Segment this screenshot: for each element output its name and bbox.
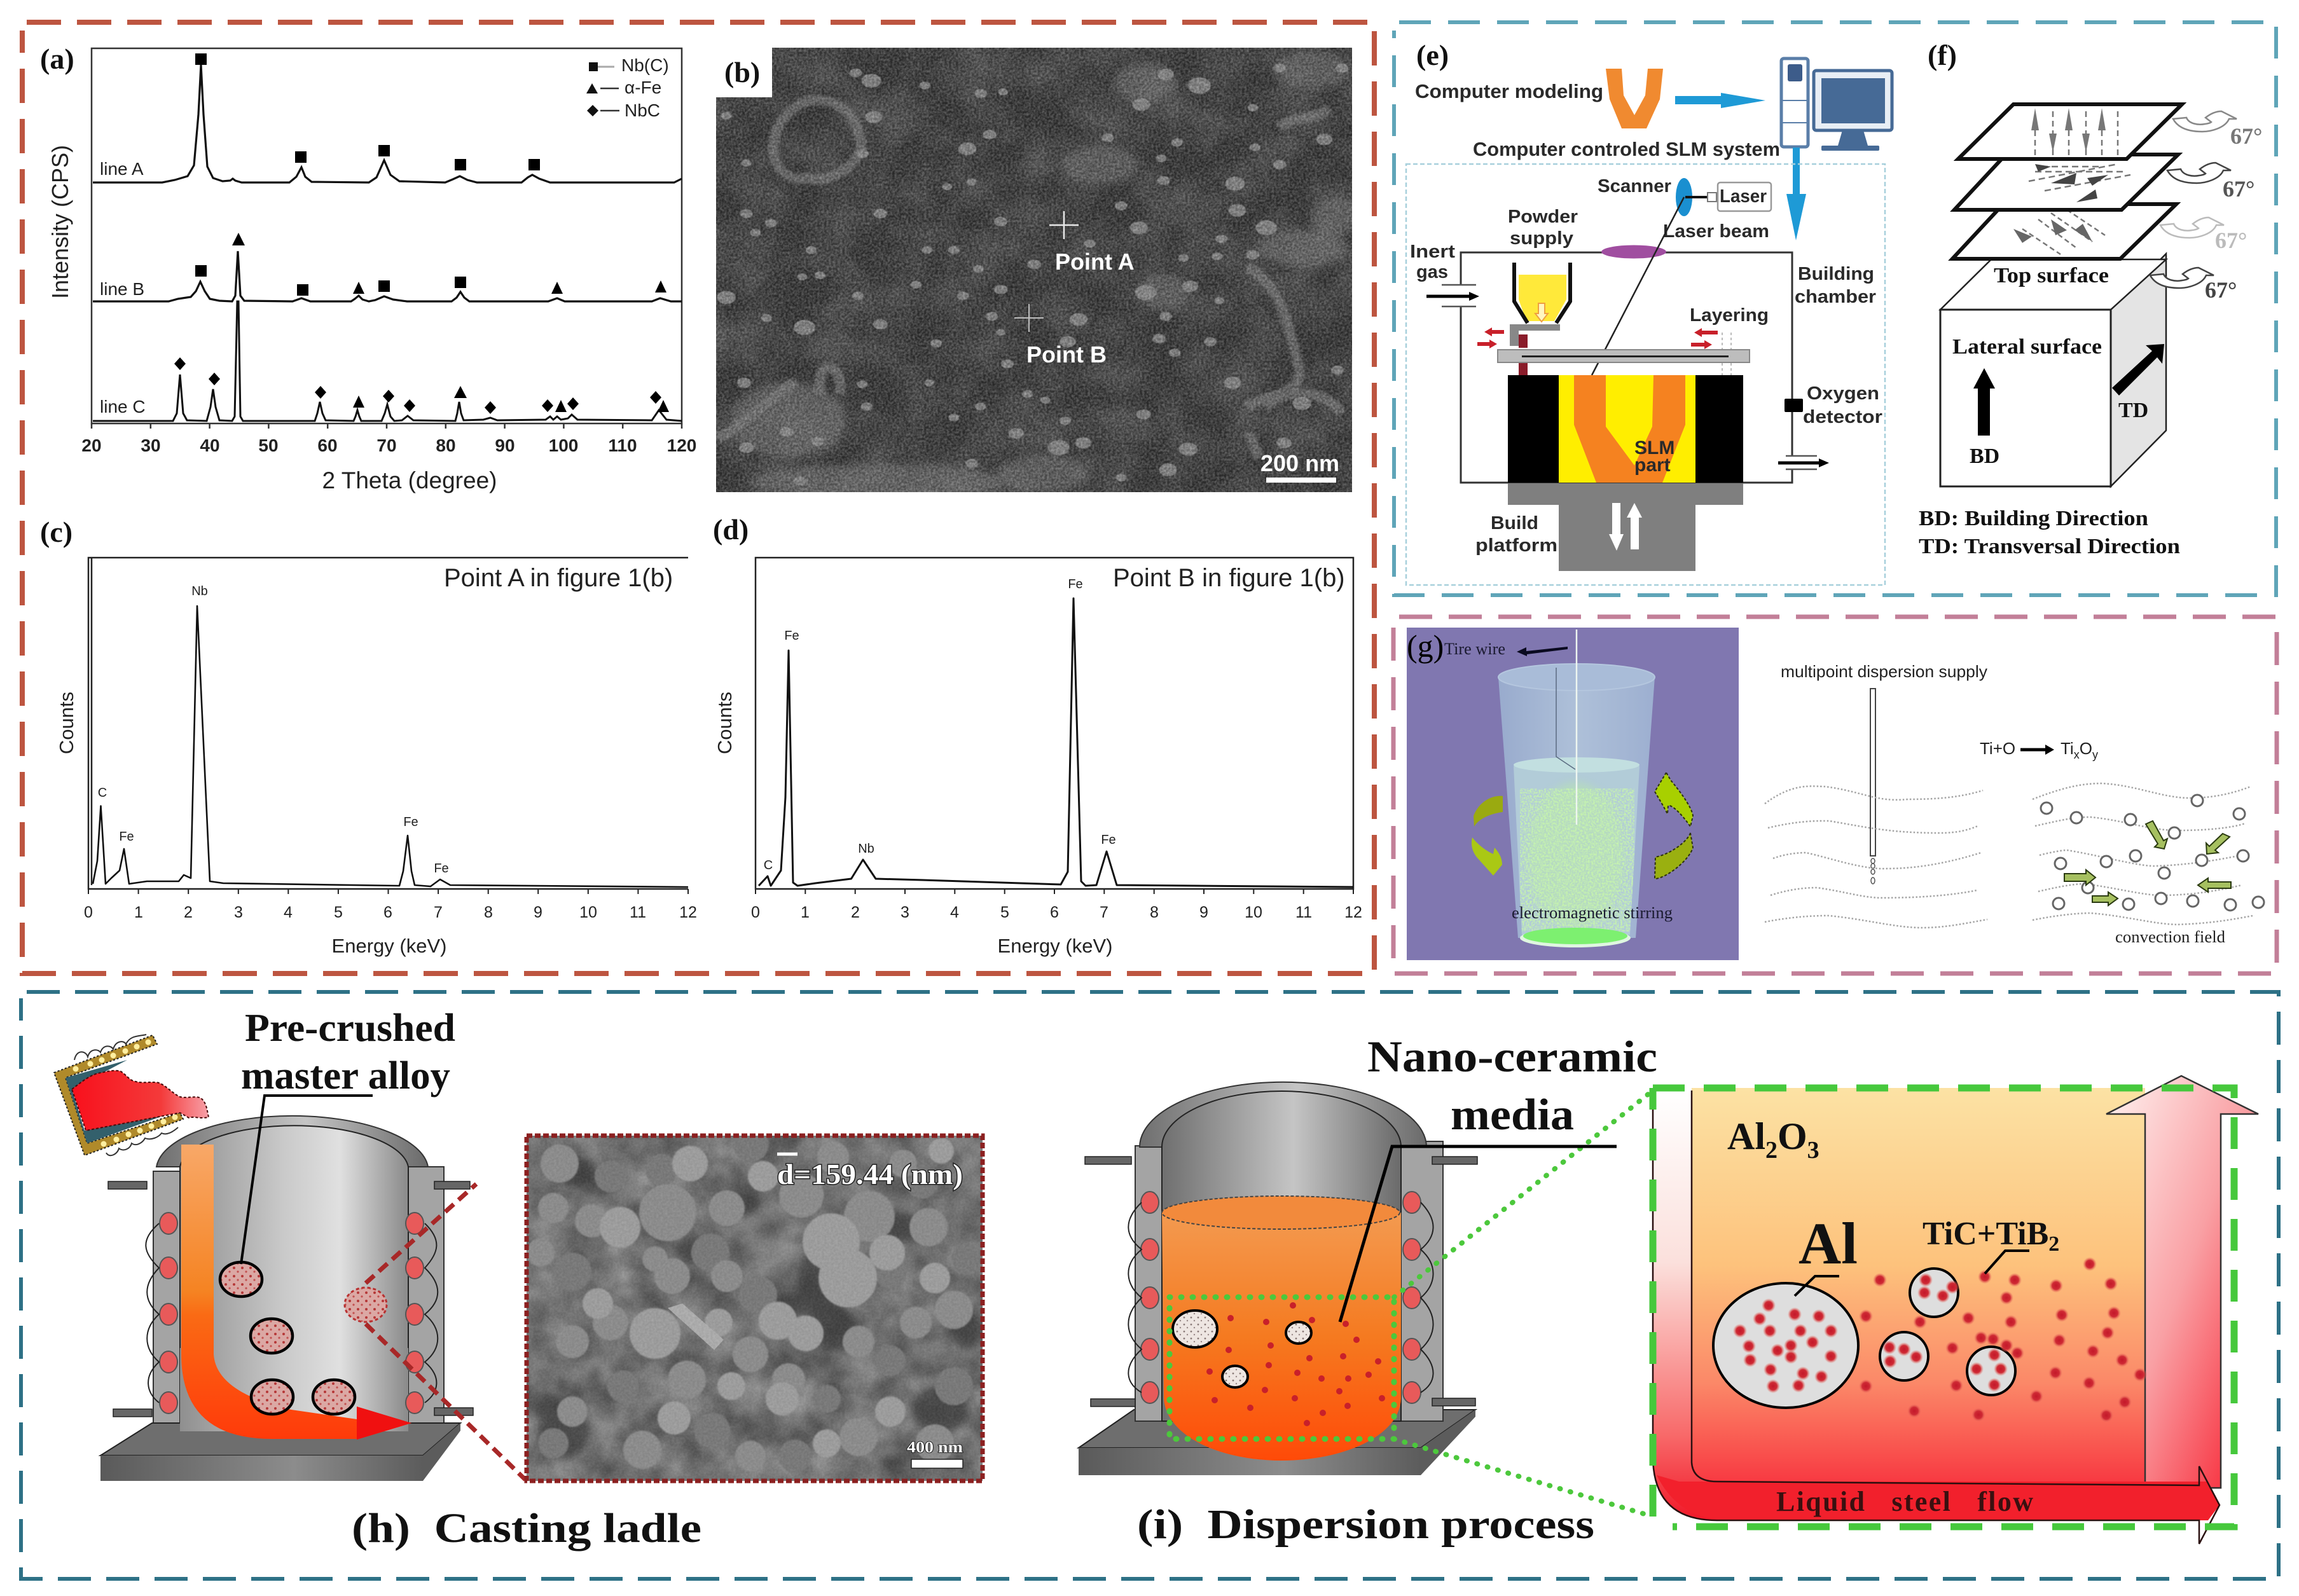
tick labels: 4 bbox=[950, 904, 959, 921]
top surface text: Top surface bbox=[1994, 264, 2109, 287]
peak labels bbox=[98, 584, 449, 876]
inner wire bbox=[1556, 668, 1575, 769]
x axis ticks bbox=[92, 423, 682, 429]
legend text bbox=[1919, 507, 2180, 558]
left coil housing bbox=[153, 1171, 180, 1431]
green zoom lines bbox=[1394, 1090, 1653, 1517]
arrow head bbox=[357, 1407, 411, 1440]
reaction formula: Ti bbox=[2061, 739, 2074, 758]
leader line bbox=[1340, 1146, 1617, 1322]
reaction formula bbox=[1980, 739, 2098, 761]
tick labels: 8 bbox=[1150, 904, 1159, 921]
panel h: casting ladle bbox=[54, 1007, 983, 1551]
SEM inset bbox=[527, 1127, 983, 1481]
inert gas text: Inert bbox=[1410, 242, 1455, 262]
oxygen detector: Oxygen bbox=[1807, 383, 1879, 404]
inert gas text: gas bbox=[1416, 262, 1448, 282]
x axis labels: 30 bbox=[141, 436, 161, 455]
caption: Point A in figure 1(b) bbox=[444, 564, 673, 592]
tick labels bbox=[84, 904, 697, 921]
scanner text: Scanner bbox=[1598, 176, 1671, 196]
recoater dotted outline bbox=[1722, 333, 1731, 375]
y axis title: Intensity (CPS) bbox=[47, 145, 73, 299]
base plate bbox=[100, 1423, 460, 1481]
electromagnetic stirring text: electromagnetic stirring bbox=[1512, 904, 1673, 922]
tick labels: 1 bbox=[801, 904, 810, 921]
reaction formula: O bbox=[2080, 739, 2092, 758]
viewing window bbox=[1601, 245, 1666, 258]
piston rods bbox=[1519, 334, 1528, 375]
panel g: wire feeding and dispersion bbox=[1407, 628, 2264, 960]
tick labels: 10 bbox=[579, 904, 597, 921]
label g: (g) bbox=[1407, 628, 1444, 664]
Al media particles bbox=[1173, 1311, 1311, 1387]
leader line bbox=[241, 1096, 373, 1264]
SLM part text bbox=[1634, 437, 1674, 476]
connectors bbox=[108, 1181, 473, 1417]
stirring arrow right bbox=[1655, 773, 1693, 879]
peak labels: Nb bbox=[191, 584, 208, 598]
rotation arrows bbox=[2150, 111, 2237, 288]
chamber enclosure bbox=[1406, 164, 1885, 585]
building chamber text: Building bbox=[1798, 264, 1874, 284]
arrow: tire wire bbox=[1517, 647, 1568, 656]
67 degree labels: 67° bbox=[2215, 228, 2247, 253]
cup bbox=[1498, 664, 1655, 938]
marker point B bbox=[1014, 304, 1044, 332]
arrow: building direction bbox=[1973, 368, 1995, 436]
ceramic particles in melt bbox=[1206, 1302, 1385, 1426]
legend: NbC bbox=[625, 100, 660, 120]
caption: Point B in figure 1(b) bbox=[1113, 564, 1345, 592]
tire wire text: Tire wire bbox=[1444, 640, 1505, 658]
liquid surface bbox=[1162, 1196, 1400, 1229]
x axis labels: 120 bbox=[667, 436, 696, 455]
tick labels: 11 bbox=[630, 904, 646, 921]
tick labels: 12 bbox=[1344, 904, 1362, 921]
tick labels: 6 bbox=[383, 904, 392, 921]
legend bbox=[586, 55, 669, 120]
legend text: TD: Transversal Direction bbox=[1919, 535, 2180, 558]
coil housings bbox=[1135, 1141, 1443, 1421]
powder supply text bbox=[1508, 207, 1578, 249]
zoomed detail bbox=[1653, 1076, 2258, 1544]
oxygen detector bbox=[1785, 383, 1882, 427]
building chamber text bbox=[1795, 264, 1876, 307]
orange flow arrow bbox=[181, 1145, 411, 1440]
vessel body bbox=[180, 1125, 408, 1431]
building chamber text: chamber bbox=[1795, 287, 1876, 307]
peak labels: Fe bbox=[434, 862, 449, 876]
x title: Energy (keV) bbox=[998, 935, 1112, 957]
tick labels: 0 bbox=[84, 904, 93, 921]
build platform text bbox=[1475, 513, 1557, 556]
lateral surface text: Lateral surface bbox=[1952, 335, 2102, 359]
small Al particles bbox=[1880, 1269, 2015, 1395]
powder hopper bbox=[1510, 263, 1570, 346]
67 degree labels: 67° bbox=[2223, 176, 2254, 202]
redraw body lower bbox=[180, 1348, 408, 1431]
reaction formula: y bbox=[2092, 748, 2098, 761]
peak labels: C bbox=[98, 786, 107, 800]
building chamber walls bbox=[1461, 252, 1792, 483]
tick labels: 5 bbox=[334, 904, 343, 921]
triangle markers alpha-Fe bbox=[232, 233, 669, 412]
frame: casting and dispersion panel (h-i) bbox=[21, 992, 2279, 1579]
arrow: model to computer bbox=[1675, 93, 1765, 108]
label e: (e) bbox=[1416, 39, 1449, 71]
liquid steel flow text: Liquid steel flow bbox=[1776, 1486, 2033, 1517]
trace line C bbox=[93, 301, 682, 421]
x axis labels: 100 bbox=[549, 436, 578, 455]
wave lines left bbox=[1765, 786, 1987, 928]
BD text: BD bbox=[1970, 444, 1999, 468]
legend: α-Fe bbox=[625, 78, 661, 97]
x axis title: 2 Theta (degree) bbox=[322, 467, 497, 493]
wave lines right bbox=[2033, 783, 2253, 925]
tick labels: 5 bbox=[1000, 904, 1009, 921]
base plate bbox=[1079, 1410, 1475, 1475]
line names bbox=[100, 159, 146, 416]
multipoint text: multipoint dispersion supply bbox=[1781, 662, 1987, 681]
inset scale bar bbox=[907, 1439, 963, 1468]
67 degree labels: 67° bbox=[2230, 123, 2262, 149]
connectors bbox=[1085, 1157, 1477, 1407]
panel a: XRD chart bbox=[40, 43, 696, 493]
tick labels: 12 bbox=[679, 904, 697, 921]
x axis labels: 20 bbox=[81, 436, 102, 455]
Al2O3 label: 2 bbox=[1765, 1137, 1778, 1164]
supply tube bbox=[1870, 689, 1875, 884]
label d: (d) bbox=[713, 513, 749, 546]
plate 2 bbox=[1954, 155, 2178, 210]
panel f: scan rotation schematic bbox=[1919, 39, 2262, 558]
tick labels: 11 bbox=[1295, 904, 1312, 921]
panel c: EDS spectrum point A bbox=[40, 516, 697, 957]
tick labels: 9 bbox=[1199, 904, 1208, 921]
text point B: Point B bbox=[1026, 341, 1107, 368]
ticks bbox=[88, 889, 688, 894]
violet simulation background bbox=[1407, 628, 1739, 960]
frame: characterization panel (a-d) bbox=[22, 22, 1374, 973]
molten steel bbox=[1162, 1213, 1401, 1461]
tick labels: 4 bbox=[284, 904, 293, 921]
TiC+TiB2 label: 2 bbox=[2048, 1232, 2059, 1256]
TiC leader bbox=[1985, 1251, 2029, 1274]
left flow band bbox=[1653, 1090, 2199, 1520]
ceramic particles bbox=[1733, 1257, 2147, 1422]
peak labels: Fe bbox=[1101, 833, 1116, 847]
plot box bbox=[92, 48, 682, 423]
build platform text: platform bbox=[1475, 535, 1557, 556]
square markers Nb(C) bbox=[195, 53, 540, 296]
green dotted region bbox=[1170, 1297, 1394, 1439]
peak labels: C bbox=[764, 858, 773, 872]
tick labels bbox=[751, 904, 1362, 921]
SEM image bbox=[716, 48, 1361, 502]
x axis labels: 40 bbox=[200, 436, 220, 455]
convection arrows bbox=[2064, 821, 2231, 905]
line names: line A bbox=[100, 159, 144, 179]
laser source bbox=[1685, 182, 1771, 211]
convection field text: convection field bbox=[2115, 928, 2225, 946]
icon: scanner lens bbox=[1676, 178, 1692, 216]
y title: Counts bbox=[55, 692, 78, 754]
diamond markers NbC bbox=[174, 357, 661, 414]
powder supply text: supply bbox=[1510, 228, 1573, 249]
reaction formula: Ti+O bbox=[1980, 739, 2015, 758]
scale bar: 200 nm bbox=[1260, 450, 1339, 476]
zoom leader lines bbox=[366, 1184, 525, 1480]
coil wires bbox=[146, 1223, 438, 1403]
system text: Computer controled SLM system bbox=[1473, 138, 1780, 160]
Al2O3 label: 3 bbox=[1807, 1137, 1819, 1164]
tick labels: 10 bbox=[1245, 904, 1262, 921]
label a: (a) bbox=[40, 43, 74, 75]
SLM part text: part bbox=[1634, 455, 1671, 476]
icon: orange model bbox=[1606, 69, 1663, 128]
spectrum bbox=[93, 606, 688, 887]
icon: computer bbox=[1781, 58, 1892, 151]
inset scale bar: 400 nm bbox=[907, 1439, 963, 1456]
marker point A bbox=[1049, 211, 1079, 239]
block bbox=[1940, 254, 2166, 486]
Al2O3 label: O bbox=[1778, 1115, 1807, 1157]
oxygen detector: detector bbox=[1803, 407, 1882, 427]
67 degree labels: 67° bbox=[2205, 277, 2237, 303]
frame: wire feeding panel (g) bbox=[1393, 617, 2277, 973]
master alloy particles bbox=[220, 1262, 355, 1414]
large Al particle bbox=[1713, 1283, 1858, 1408]
y title: Counts bbox=[714, 692, 736, 754]
tick labels: 2 bbox=[851, 904, 860, 921]
legend: Nb(C) bbox=[621, 55, 669, 75]
line names: line B bbox=[100, 279, 144, 299]
inert gas text bbox=[1410, 242, 1455, 282]
spectrum bbox=[759, 598, 1353, 887]
tick labels: 3 bbox=[901, 904, 909, 921]
ticks bbox=[756, 889, 1353, 894]
pre-crushed label: Pre-crushed bbox=[245, 1007, 455, 1050]
plate 3 bbox=[1952, 204, 2176, 259]
axes bbox=[88, 558, 688, 889]
arrow: transversal direction bbox=[2112, 344, 2164, 396]
line names: line C bbox=[100, 397, 146, 416]
label f: (f) bbox=[1928, 39, 1957, 71]
bright crystal block bbox=[668, 1304, 724, 1350]
build platform bbox=[1508, 483, 1743, 571]
tick labels: 2 bbox=[184, 904, 193, 921]
peak labels bbox=[764, 577, 1116, 872]
nano-ceramic media label: Nano-ceramic bbox=[1367, 1033, 1657, 1082]
recoater bar bbox=[1498, 350, 1750, 362]
peak labels: Fe bbox=[784, 629, 799, 643]
plate 1 bbox=[1958, 104, 2182, 159]
label c: (c) bbox=[40, 516, 72, 548]
panel d: EDS spectrum point B bbox=[713, 513, 1362, 957]
computer modeling text: Computer modeling bbox=[1415, 80, 1603, 102]
label b: (b) bbox=[724, 56, 760, 88]
laser beam line bbox=[1592, 197, 1684, 375]
build platform text: Build bbox=[1491, 513, 1538, 533]
caption h: (h) Casting ladle bbox=[352, 1505, 701, 1551]
Al2O3 label: Al bbox=[1727, 1115, 1765, 1157]
trace line B bbox=[93, 251, 682, 301]
Al label: Al bbox=[1798, 1211, 1858, 1277]
tick labels: 6 bbox=[1050, 904, 1059, 921]
tick labels: 9 bbox=[534, 904, 542, 921]
TD text: TD bbox=[2118, 399, 2148, 422]
nano-ceramic media label: media bbox=[1451, 1090, 1574, 1139]
panel b: SEM micrograph bbox=[716, 48, 1361, 502]
x axis labels bbox=[81, 436, 696, 455]
vessel body bbox=[1162, 1091, 1401, 1421]
panel i: dispersion process bbox=[1079, 1033, 2258, 1548]
x axis labels: 50 bbox=[258, 436, 279, 455]
green dashed frame bbox=[1653, 1088, 2234, 1527]
legend text: BD: Building Direction bbox=[1919, 507, 2148, 530]
coils left bbox=[160, 1213, 177, 1414]
text point A: Point A bbox=[1055, 249, 1135, 275]
coils bbox=[1141, 1192, 1421, 1403]
layering text: Layering bbox=[1690, 305, 1769, 326]
pre-crushed label: master alloy bbox=[241, 1054, 450, 1097]
pouring crucible icon bbox=[54, 1035, 209, 1155]
arrow: computer to chamber bbox=[1786, 148, 1806, 240]
flow outlines bbox=[1653, 1090, 2220, 1544]
coil wires bbox=[1128, 1202, 1433, 1393]
wire lines bbox=[1576, 629, 1577, 825]
laser source: Laser bbox=[1720, 186, 1767, 207]
SLM part text: SLM bbox=[1634, 437, 1674, 458]
peak labels: Fe bbox=[403, 815, 418, 829]
trace line A bbox=[93, 65, 682, 182]
tick labels: 7 bbox=[434, 904, 443, 921]
x axis labels: 70 bbox=[376, 436, 397, 455]
right flow stem with up arrow bbox=[2106, 1076, 2258, 1488]
tick labels: 3 bbox=[234, 904, 243, 921]
peak labels: Nb bbox=[858, 842, 874, 856]
nano-ceramic media label bbox=[1367, 1033, 1657, 1139]
bottom flow band bbox=[1657, 1475, 2220, 1520]
axes box bbox=[756, 558, 1353, 889]
x axis labels: 80 bbox=[436, 436, 456, 455]
peak labels: Fe bbox=[119, 830, 134, 844]
interior gradient bbox=[1692, 1088, 2145, 1482]
x axis labels: 60 bbox=[317, 436, 338, 455]
TiC+TiB2 label: TiC+TiB bbox=[1923, 1216, 2048, 1252]
tick labels: 0 bbox=[751, 904, 760, 921]
tick labels: 8 bbox=[484, 904, 493, 921]
panel e: SLM system schematic bbox=[1406, 39, 1892, 585]
oxide particles bbox=[2041, 795, 2264, 911]
powder supply text: Powder bbox=[1508, 207, 1578, 227]
vessel dome bbox=[1140, 1082, 1426, 1147]
caption i: (i) Dispersion process bbox=[1137, 1501, 1594, 1548]
gas inlet valve bbox=[1426, 285, 1479, 306]
Al leader bbox=[1795, 1276, 1839, 1296]
reaction formula: x bbox=[2074, 748, 2080, 761]
molten liquid bbox=[1514, 757, 1640, 947]
frame: SLM panel (e-f) bbox=[1394, 22, 2276, 595]
vessel dome bbox=[156, 1116, 428, 1167]
tick labels: 1 bbox=[134, 904, 143, 921]
x title: Energy (keV) bbox=[332, 935, 446, 957]
coils right bbox=[406, 1213, 424, 1414]
stirring arrow left bbox=[1472, 796, 1503, 876]
mean particle size: d=159.44 (nm) bbox=[777, 1158, 963, 1190]
tick labels: 7 bbox=[1100, 904, 1108, 921]
pre-crushed label bbox=[241, 1007, 455, 1097]
right coil housing bbox=[408, 1167, 444, 1427]
laser beam text: Laser beam bbox=[1663, 221, 1769, 242]
67 degree labels bbox=[2205, 123, 2262, 303]
build cylinder bbox=[1508, 375, 1743, 483]
peak labels: Fe bbox=[1068, 577, 1083, 591]
red motion arrows bbox=[1477, 327, 1718, 349]
x axis labels: 90 bbox=[495, 436, 515, 455]
x axis labels: 110 bbox=[608, 436, 637, 455]
zoom circle bbox=[345, 1288, 387, 1322]
gas outlet valve bbox=[1778, 456, 1829, 469]
